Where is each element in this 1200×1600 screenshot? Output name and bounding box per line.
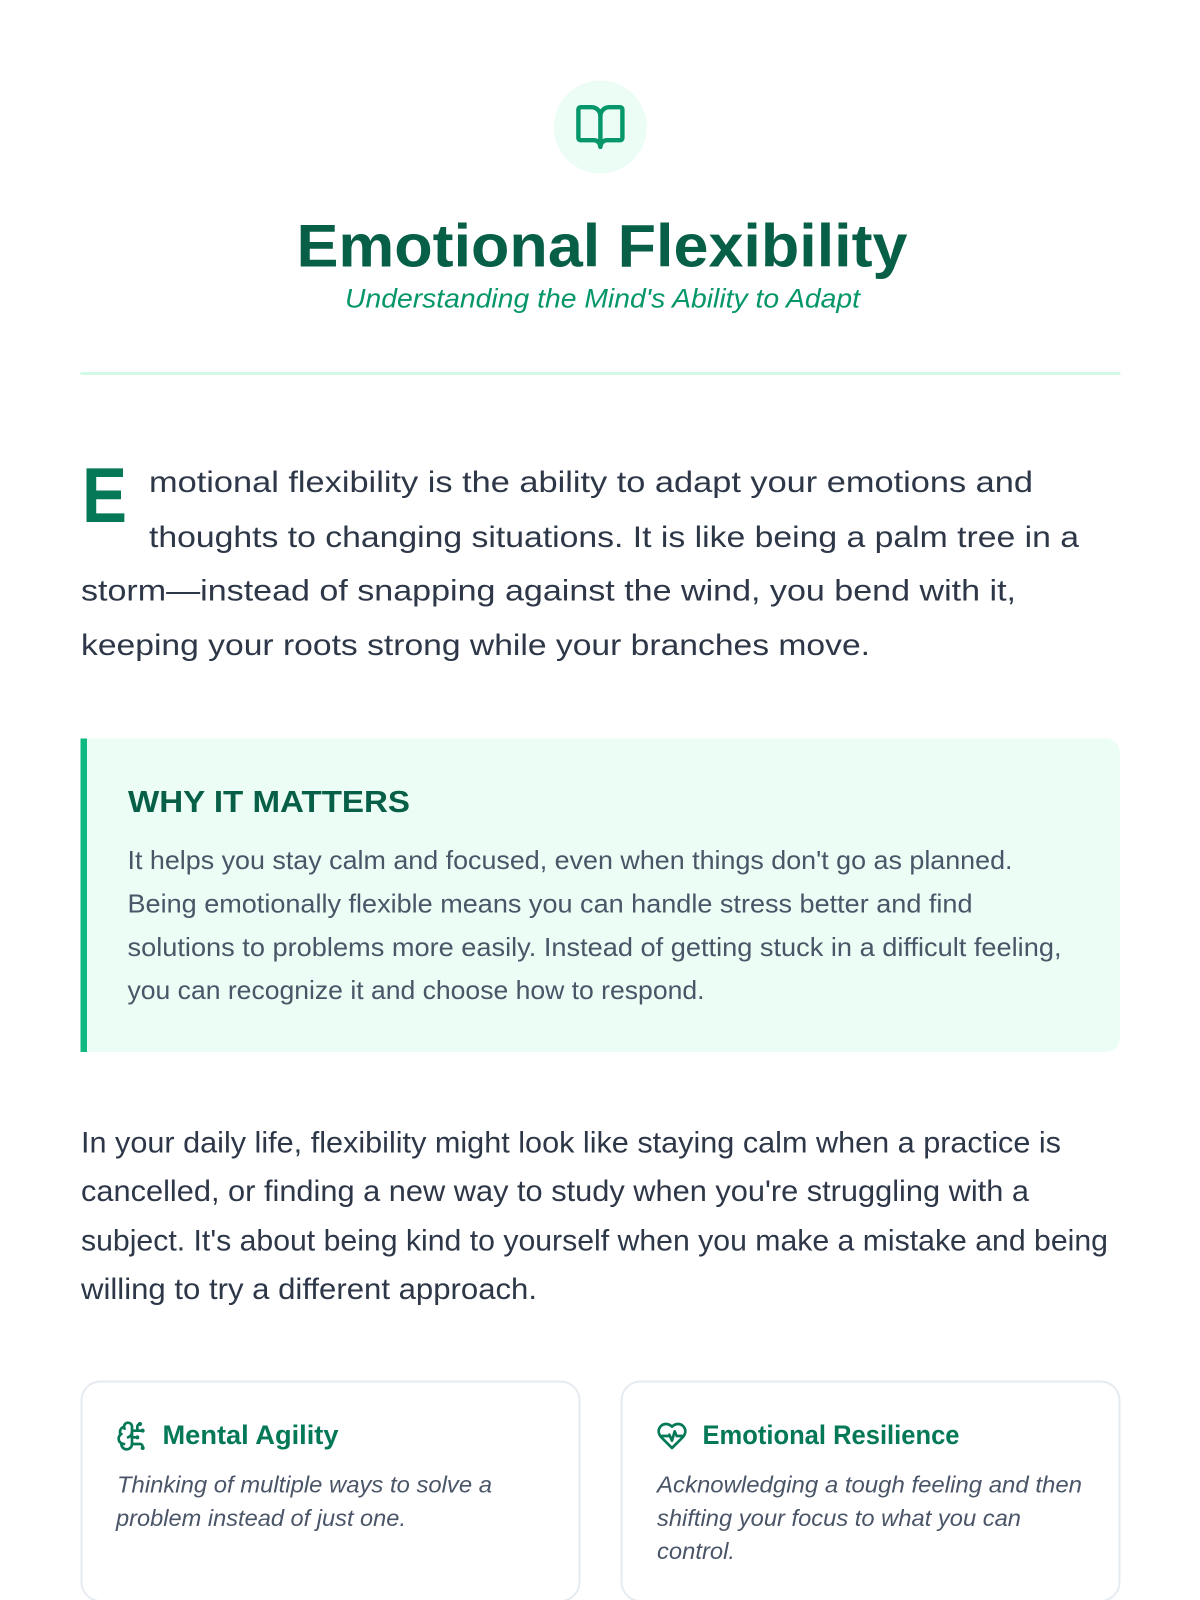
daily life paragraph: willing to try a different approach.	[80, 1273, 537, 1306]
title: Emotional Flexibility	[296, 212, 908, 280]
intro paragraph: keeping your roots strong while your branches move.	[81, 629, 870, 662]
callout text: It helps you stay calm and focused, even when things don't go as planned.	[128, 845, 1012, 875]
panel: emotional resilience	[622, 1382, 1120, 1600]
callout heading: WHY IT MATTERS	[128, 784, 410, 819]
subtitle: Understanding the Mind's Ability to Adapt	[345, 284, 862, 314]
card text: Acknowledging a tough feeling and then	[655, 1472, 1082, 1498]
panel: mental agility	[82, 1382, 580, 1600]
callout text: you can recognize it and choose how to respond.	[128, 975, 704, 1005]
card text: problem instead of just one.	[115, 1505, 406, 1531]
panel: why it matters	[80, 738, 1120, 1052]
daily life paragraph: In your daily life, flexibility might look like staying calm when a practice is	[81, 1126, 1061, 1160]
header	[296, 80, 908, 314]
drop cap: E	[82, 451, 127, 539]
daily life paragraph: subject. It's about being kind to yourself when you make a mistake and being	[81, 1224, 1108, 1258]
intro paragraph: motional flexibility is the ability to adapt your emotions and	[149, 466, 1033, 499]
daily life paragraph: cancelled, or finding a new way to study when you're struggling with a	[81, 1175, 1029, 1208]
callout text: Being emotionally flexible means you can handle stress better and find	[128, 888, 973, 918]
icon: brain circuit	[119, 1423, 143, 1449]
card text: shifting your focus to what you can	[657, 1505, 1021, 1531]
card text	[655, 1472, 1082, 1564]
card text: Thinking of multiple ways to solve a	[117, 1472, 492, 1498]
card heading: Emotional Resilience	[702, 1420, 960, 1450]
icon: heart pulse	[659, 1424, 685, 1448]
intro paragraph: storm—instead of snapping against the wind, you bend with it,	[81, 574, 1016, 608]
callout text: solutions to problems more easily. Instead of getting stuck in a difficult feeling,	[128, 932, 1062, 962]
daily life paragraph	[80, 1126, 1108, 1306]
intro paragraph	[81, 451, 1079, 662]
card text: control.	[657, 1538, 735, 1564]
intro paragraph: thoughts to changing situations. It is like being a palm tree in a	[149, 521, 1079, 554]
callout text	[128, 845, 1062, 1005]
icon: open book	[554, 80, 647, 174]
card heading: Mental Agility	[162, 1420, 338, 1450]
card text	[115, 1472, 492, 1531]
